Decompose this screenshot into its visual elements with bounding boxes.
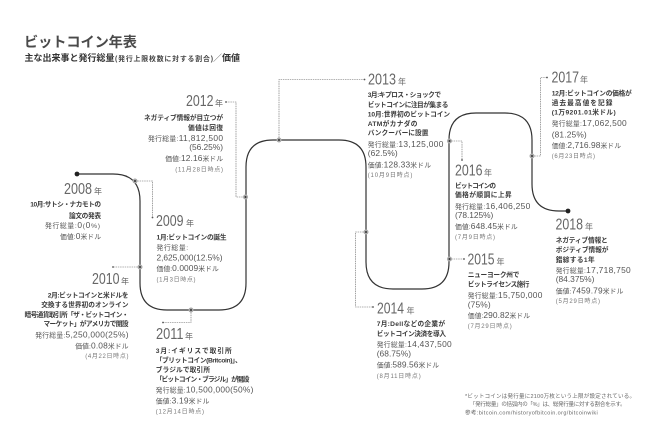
panel: 2010: マーケット」がアメリカで開設 bbox=[44, 319, 129, 328]
panel: 2012: 2012 bbox=[186, 93, 214, 110]
panel: 2014: 発行総量:14,437,500 bbox=[377, 339, 452, 349]
panel: 2016: 年 bbox=[484, 168, 492, 178]
panel: 2018: 価値:7459.79米ドル bbox=[556, 286, 624, 296]
panel: 2013: 価値:128.33米ドル bbox=[368, 160, 431, 170]
panel: 2011 bbox=[156, 326, 254, 416]
panel: 2008: 年 bbox=[94, 186, 102, 196]
panel: 2012: ネガティブ情報が目立つが bbox=[144, 113, 223, 122]
panel: 2009: 1月:ビットコインの誕生 bbox=[156, 232, 227, 242]
panel: 2015: ニューヨーク州で bbox=[468, 270, 520, 279]
panel: 2016: 2016 bbox=[455, 163, 482, 180]
panel: 2018: 2018 bbox=[556, 217, 583, 234]
footnote bbox=[465, 392, 635, 416]
panel: 2012: 発行総量:11,812,500 bbox=[148, 133, 223, 143]
panel: 2011: 発行総量:10,500,000(50%) bbox=[156, 384, 254, 394]
footnote: 参考:bitcoin.com/historyofbitcoin.org/bitcoinwiki bbox=[465, 408, 598, 416]
connector end dots bbox=[112, 77, 548, 323]
subtitle: 価値 bbox=[222, 52, 240, 63]
panel: 2012 bbox=[144, 93, 223, 174]
panel: 2008: 発行総量:0(0%) bbox=[45, 220, 100, 230]
panel: 2015: ビットライセンス施行 bbox=[468, 280, 530, 288]
panel: 2015: 発行総量:15,750,000 bbox=[468, 290, 543, 300]
footnote: *ビットコインは発行量に2100万枚という上限が設定されている。 bbox=[465, 392, 635, 400]
panel: 2010: 年 bbox=[121, 276, 129, 286]
panel: 2016: (7月9日時点) bbox=[455, 233, 495, 241]
panel: 2012: 価値:12.16米ドル bbox=[165, 153, 223, 163]
panel: 2008: 論文の発表 bbox=[69, 211, 101, 220]
timeline nodes bbox=[75, 138, 570, 312]
subtitle: (発行上限枚数に対する割合) bbox=[115, 54, 213, 63]
panel: 2012: (11月28日時点) bbox=[175, 166, 223, 174]
panel: 2018: 錯綜する1年 bbox=[556, 255, 595, 264]
panel: 2014: 2014 bbox=[377, 301, 404, 318]
panel: 2016: 発行総量:16,406,250 bbox=[455, 201, 531, 211]
connector lines bbox=[113, 78, 547, 322]
panel: 2010: (4月22日時点) bbox=[85, 352, 128, 360]
panel: 2011: (12月14日時点) bbox=[156, 408, 204, 416]
panel: 2017: (1万9201.01米ドル) bbox=[552, 108, 616, 116]
panel: 2010: 暗号通貨取引所「ザ・ビットコイン・ bbox=[24, 310, 128, 319]
panel: 2016: ビットコインの bbox=[455, 181, 496, 190]
panel: 2011: 「ビットコイン・ブラジル」が開設 bbox=[156, 374, 250, 384]
panel: 2017: 12月:ビットコインの価格が bbox=[552, 88, 632, 98]
panel: 2010: 交換する世界初のオンライン bbox=[41, 300, 129, 309]
panel: 2012: (56.25%) bbox=[189, 142, 223, 152]
panel: 2010: 発行総量:5,250,000(25%) bbox=[35, 330, 129, 340]
subtitle bbox=[24, 52, 240, 63]
panel: 2011: 価値:3.19米ドル bbox=[156, 396, 210, 406]
panel: 2010: 2月:ビットコインと米ドルを bbox=[48, 290, 129, 300]
panel: 2018: (5月29日時点) bbox=[556, 297, 600, 305]
panel: 2008 bbox=[30, 181, 102, 241]
panel: 2015: 2015 bbox=[468, 252, 494, 269]
panel: 2016: 価格が順調に上昇 bbox=[455, 190, 512, 199]
panel: 2017: (6月23日時点) bbox=[552, 152, 595, 160]
panel: 2013: バンクーバーに設置 bbox=[368, 128, 429, 137]
panel: 2010: 価値:0.08米ドル bbox=[75, 340, 129, 350]
panel: 2008: 10月:サトシ・ナカモトの bbox=[30, 200, 101, 208]
panel: 2011: 3月:イギリスで取引所 bbox=[156, 346, 232, 355]
panel: 2015: (75%) bbox=[468, 300, 491, 310]
panel: 2013: (62.5%) bbox=[368, 148, 398, 158]
panel: 2010: 2010 bbox=[92, 271, 120, 288]
panel: 2013: ビットコインに注目が集まる bbox=[368, 100, 448, 109]
panel: 2013: 発行総量:13,125,000 bbox=[368, 139, 444, 149]
panel: 2014: (8月11日時点) bbox=[377, 372, 421, 380]
panel: 2018: 発行総量:17,718,750 bbox=[556, 265, 631, 275]
panel: 2013: 年 bbox=[398, 77, 406, 87]
panel: 2011: 年 bbox=[185, 331, 193, 341]
panel: 2009 bbox=[156, 213, 227, 284]
panel: 2013 bbox=[368, 72, 450, 179]
panel: 2013: 10月:世界初のビットコイン bbox=[368, 110, 450, 118]
panel: 2017: (81.25%) bbox=[552, 130, 587, 140]
panel: 2014: (68.75%) bbox=[377, 348, 411, 358]
panel: 2018: 年 bbox=[585, 222, 593, 232]
panel: 2009: 2009 bbox=[156, 213, 184, 230]
panel: 2014: 年 bbox=[406, 306, 414, 316]
panel: 2015: (7月29日時点) bbox=[468, 322, 512, 330]
panel: 2013: (10月9日時点) bbox=[368, 171, 412, 179]
panel: 2010 bbox=[24, 271, 129, 360]
panel: 2016: (78.125%) bbox=[455, 210, 494, 220]
panel: 2018 bbox=[556, 217, 631, 305]
panel: 2008: 価値:0米ドル bbox=[60, 231, 101, 241]
panel: 2013: 3月:キプロス・ショックで bbox=[368, 90, 441, 99]
panel: 2015: 価値:290.82米ドル bbox=[468, 310, 530, 320]
panel: 2014 bbox=[377, 301, 452, 380]
panel: 2015: 年 bbox=[496, 257, 504, 267]
panel: 2016: 価値:648.45米ドル bbox=[455, 221, 518, 231]
panel: 2011: 2011 bbox=[156, 326, 184, 343]
panel: 2018: (84.375%) bbox=[556, 274, 595, 284]
timeline curve bbox=[77, 113, 568, 310]
panel: 2014: 7月:Dellなどの企業が bbox=[377, 319, 445, 328]
subtitle: ／ bbox=[213, 53, 222, 63]
panel: 2009: (1月3日時点) bbox=[156, 276, 196, 284]
panel: 2017: 年 bbox=[580, 75, 588, 85]
panel: 2016 bbox=[455, 163, 531, 241]
panel: 2009: 2,625,000(12.5%) bbox=[156, 252, 223, 262]
panel: 2013: ATMがカナダの bbox=[368, 119, 418, 128]
panel: 2014: 価値:589.56米ドル bbox=[377, 360, 439, 370]
panel: 2009: 価値:0.0009米ドル bbox=[156, 263, 219, 273]
panel: 2009: 年 bbox=[186, 218, 194, 228]
panel: 2013: 2013 bbox=[368, 72, 396, 89]
panel: 2012: 価値は回復 bbox=[188, 123, 223, 132]
panel: 2015 bbox=[468, 252, 543, 330]
subtitle: 主な出来事と発行総量 bbox=[24, 52, 114, 63]
panel: 2017 bbox=[552, 70, 632, 160]
panel: 2018: ネガティブ情報と bbox=[556, 236, 608, 244]
panel: 2017: 2017 bbox=[552, 70, 579, 87]
panel: 2017: 発行総量:17,062,500 bbox=[552, 118, 627, 128]
panel: 2008: 2008 bbox=[64, 181, 92, 198]
panel: 2011: 「ブリットコイン(Britcoin)」、 bbox=[156, 356, 242, 364]
panel: 2012: 年 bbox=[215, 98, 223, 108]
title: ビットコイン年表 bbox=[24, 34, 137, 51]
panel: 2017: 価値:2,716.98米ドル bbox=[552, 140, 621, 150]
panel: 2014: ビットコイン決済を導入 bbox=[377, 329, 446, 338]
footnote: 「発行総量」の括弧内の「%」は、総発行量に対する割合を示す。 bbox=[470, 400, 626, 408]
panel: 2017: 過去最高値を記録 bbox=[552, 98, 613, 107]
panel: 2009: 発行総量: bbox=[156, 243, 188, 252]
panel: 2011: ブラジルで取引所 bbox=[156, 365, 210, 374]
panel: 2018: ポジティブ情報が bbox=[556, 245, 609, 254]
